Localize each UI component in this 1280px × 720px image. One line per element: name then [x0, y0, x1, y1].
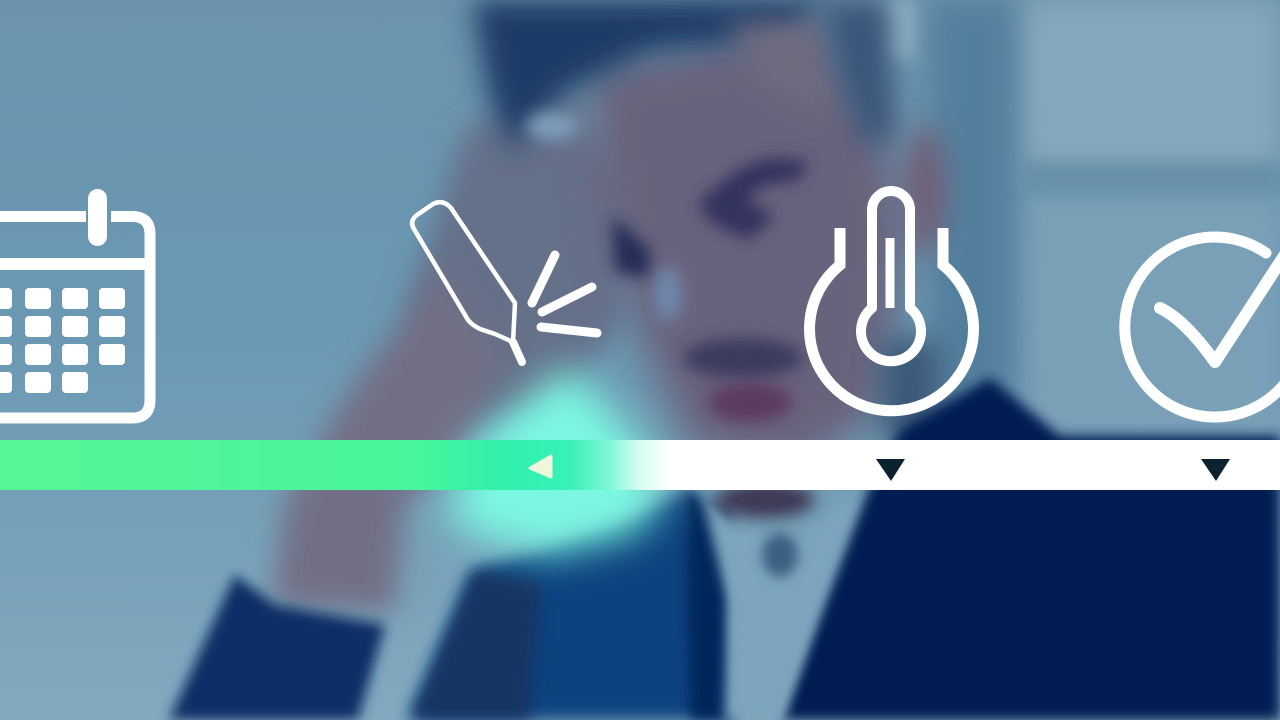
suit	[410, 490, 730, 720]
face	[590, 30, 905, 470]
blue reflection	[654, 266, 682, 322]
glow around the progress marker	[445, 365, 665, 555]
forearm	[272, 270, 500, 612]
moustache and mouth	[683, 338, 803, 378]
active marker	[530, 456, 551, 477]
icon: thermometer in power ring	[810, 191, 974, 411]
shirt collar	[700, 490, 860, 720]
light spot on hand	[526, 112, 578, 140]
hand	[410, 90, 625, 440]
icon: headache pen shape with rays	[412, 202, 597, 362]
marker: thermometer step	[876, 459, 905, 481]
hair	[472, 0, 830, 150]
neck shadow over collar	[715, 482, 815, 518]
ear	[903, 125, 947, 255]
icon: check mark in circle	[1125, 216, 1280, 417]
eyes	[697, 158, 808, 240]
tie knot	[762, 533, 798, 577]
icon: calendar	[0, 189, 150, 418]
marker: check step	[1201, 459, 1230, 481]
neck shadow	[880, 340, 940, 440]
progress bar	[0, 440, 1280, 490]
